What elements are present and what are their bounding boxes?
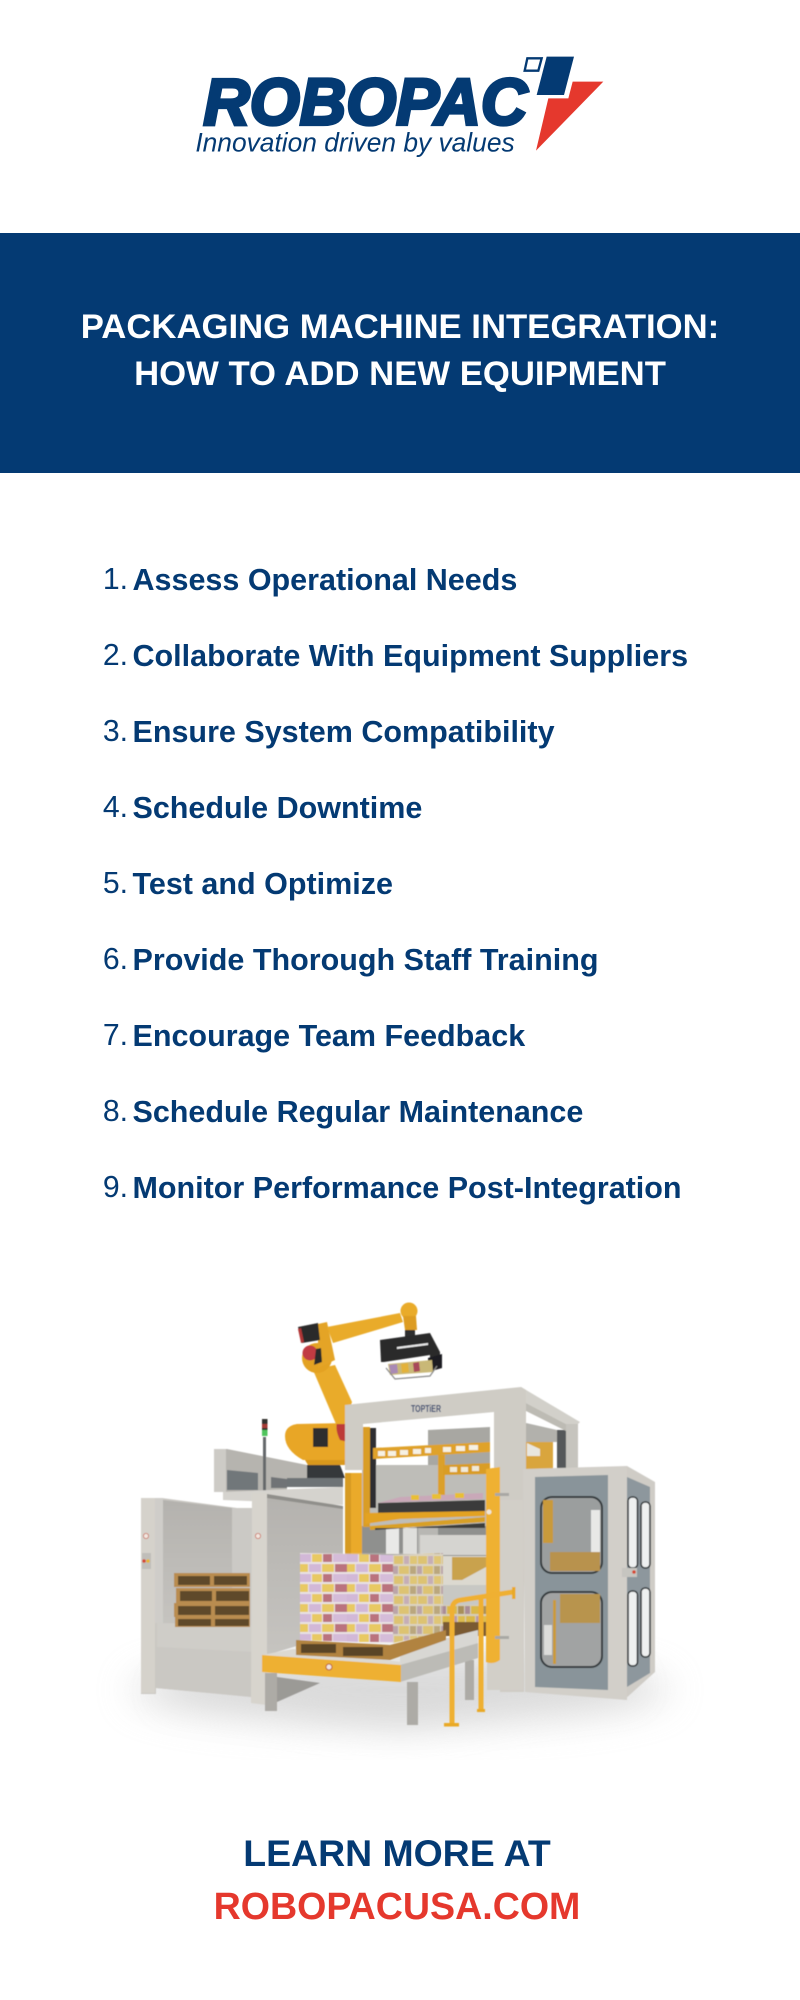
wordmark: ROBOPAC — [203, 64, 529, 138]
step 5: 5. — [103, 867, 128, 900]
website address: ROBOPACUSA.COM — [214, 1885, 580, 1927]
floor shadow — [130, 1654, 670, 1728]
gripper — [380, 1330, 442, 1379]
call to action — [214, 1832, 580, 1927]
step 8: Schedule Regular Maintenance — [132, 1095, 583, 1129]
step 7: 7. — [103, 1019, 128, 1052]
wrapper cabinet — [523, 1466, 655, 1700]
main frame — [345, 1387, 526, 1692]
illustration: palletizing machine with robot arm — [132, 1302, 668, 1744]
title line 2: HOW TO ADD NEW EQUIPMENT — [134, 355, 666, 393]
step 2: Collaborate With Equipment Suppliers — [132, 639, 688, 673]
logo: Robopac — [195, 56, 604, 158]
title banner — [0, 233, 800, 473]
back wall panels — [214, 1449, 307, 1492]
door windows — [541, 1497, 650, 1667]
interior behind carriage — [362, 1427, 490, 1556]
back frame side — [521, 1387, 580, 1470]
learn more heading: LEARN MORE AT — [243, 1832, 551, 1874]
TOPTIER label: TOPTiER — [411, 1404, 442, 1415]
step 7: Encourage Team Feedback — [132, 1019, 525, 1053]
logo mark — [525, 57, 603, 151]
step 3: 3. — [103, 715, 128, 748]
rear machinery seen below carriage — [443, 1556, 486, 1636]
signal light tower — [262, 1419, 268, 1491]
step 4: Schedule Downtime — [132, 791, 422, 825]
step 9: 9. — [103, 1171, 128, 1204]
step 2: 2. — [103, 639, 128, 672]
railing feet and bracket — [444, 1587, 516, 1726]
left pallet magazine — [141, 1498, 252, 1697]
yellow infeed platform — [262, 1649, 401, 1682]
tagline: Innovation driven by values — [195, 128, 515, 158]
yellow safety railing — [452, 1592, 513, 1724]
conveyor supports — [265, 1660, 474, 1725]
yellow lift carriage — [345, 1427, 490, 1555]
step 5: Test and Optimize — [132, 867, 393, 901]
roller conveyor — [400, 1630, 478, 1682]
step 3: Ensure System Compatibility — [132, 715, 555, 749]
step 8: 8. — [103, 1095, 128, 1128]
numbered list of steps — [103, 563, 688, 1205]
step 6: 6. — [103, 943, 128, 976]
step 1: 1. — [103, 563, 128, 596]
step 6: Provide Thorough Staff Training — [132, 943, 598, 977]
step 9: Monitor Performance Post-Integration — [132, 1171, 682, 1205]
step 1: Assess Operational Needs — [132, 563, 517, 597]
wrapped pallet load — [296, 1553, 446, 1660]
title line 1: PACKAGING MACHINE INTEGRATION: — [81, 308, 719, 346]
yellow guard post — [486, 1467, 509, 1663]
second magazine post and panel — [223, 1487, 343, 1705]
robot arm — [285, 1302, 418, 1487]
step 4: 4. — [103, 791, 128, 824]
wooden pallets — [174, 1573, 250, 1627]
